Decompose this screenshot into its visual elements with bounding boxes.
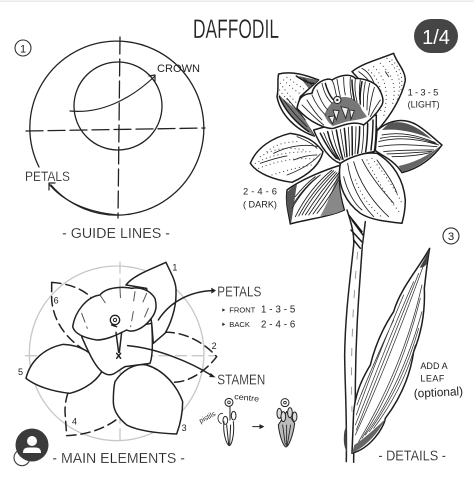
- add a leaf note: LEAF: [420, 374, 445, 384]
- back petal 1 light: [352, 53, 405, 131]
- add a leaf note: [413, 361, 463, 401]
- frill folds: [82, 288, 148, 328]
- dashed back petals: [52, 282, 217, 436]
- light petals label: [408, 87, 440, 109]
- front back list: [222, 305, 295, 331]
- front back list: FRONT: [229, 306, 256, 315]
- guide lines caption: - GUIDE LINES -: [62, 225, 170, 242]
- petal number labels: 1: [172, 262, 177, 272]
- back petal 6 dark: [277, 73, 319, 136]
- user avatar badge: [16, 428, 48, 462]
- petal number labels: [18, 262, 217, 433]
- front back list: BACK: [229, 320, 250, 329]
- panel: main elements: [14, 262, 297, 467]
- panel: guide lines: [15, 37, 205, 242]
- dark petals label: 2-4-6: [243, 187, 277, 197]
- petal 3 outline: [113, 365, 183, 434]
- dark petals label: ( DARK): [243, 199, 277, 209]
- crown tube: [314, 115, 376, 163]
- step number 1: 1: [20, 44, 26, 56]
- petal 5 outline: [26, 344, 103, 393]
- stamen arrow: [128, 346, 216, 377]
- petals label: PETALS: [25, 168, 70, 184]
- details caption: - DETAILS -: [378, 447, 446, 464]
- front back list: 1-3-5: [261, 305, 295, 316]
- pistil sketch: pistils: [198, 410, 217, 425]
- title: DAFFODIL: [193, 14, 279, 44]
- side petal 2 dark: [375, 121, 442, 173]
- crown tube outline: [82, 323, 152, 375]
- stem: [344, 210, 365, 462]
- panel: finished daffodil flower: [243, 53, 459, 244]
- petal number labels: 4: [72, 416, 77, 426]
- lower petal 4 dark: [287, 165, 344, 224]
- petals label: PETALS: [217, 285, 261, 301]
- pistil sketch: centre: [234, 392, 260, 404]
- leaf: [352, 248, 430, 453]
- petals arrow: [49, 183, 118, 215]
- step number 1: [15, 40, 31, 56]
- dashed axes: [26, 37, 205, 218]
- transition arrow: [252, 425, 263, 428]
- dark petals label: [243, 187, 277, 209]
- crown arrow: [70, 75, 155, 111]
- pistil sketch: [198, 392, 260, 446]
- crown frill outline: [73, 287, 156, 340]
- stamen label: STAMEN: [217, 372, 265, 388]
- crown label: CROWN: [157, 63, 200, 75]
- light petals label: 1-3-5: [408, 87, 438, 97]
- petal number labels: 3: [182, 423, 187, 433]
- finished stamen sketch: [277, 399, 297, 447]
- add a leaf note: ADD A: [420, 361, 448, 371]
- page badge: [414, 19, 458, 53]
- front petal 3 light: [339, 153, 405, 223]
- petal 1 outline: [126, 262, 176, 343]
- panel: details stem and leaf: [344, 210, 463, 464]
- gray guide circle and axes: [25, 262, 217, 445]
- petal number labels: 2: [212, 341, 217, 351]
- petals arrow: [158, 288, 216, 320]
- petal number labels: 6: [54, 296, 59, 306]
- front back list: 2-4-6: [261, 320, 295, 331]
- light petals label: (LIGHT): [408, 99, 440, 109]
- side petal 5 light: [250, 133, 323, 182]
- add a leaf note: (optional): [413, 384, 463, 401]
- stamen: [329, 96, 354, 124]
- petal number labels: 5: [18, 367, 23, 377]
- main elements caption: - MAIN ELEMENTS -: [52, 450, 185, 467]
- page badge: 1/4: [422, 27, 450, 49]
- step number 3: 3: [448, 231, 454, 243]
- central stamen: [110, 315, 122, 358]
- crown frill: [297, 75, 383, 128]
- step number 2: [14, 450, 30, 466]
- guide circles: [30, 41, 204, 215]
- step number 3: [443, 228, 459, 244]
